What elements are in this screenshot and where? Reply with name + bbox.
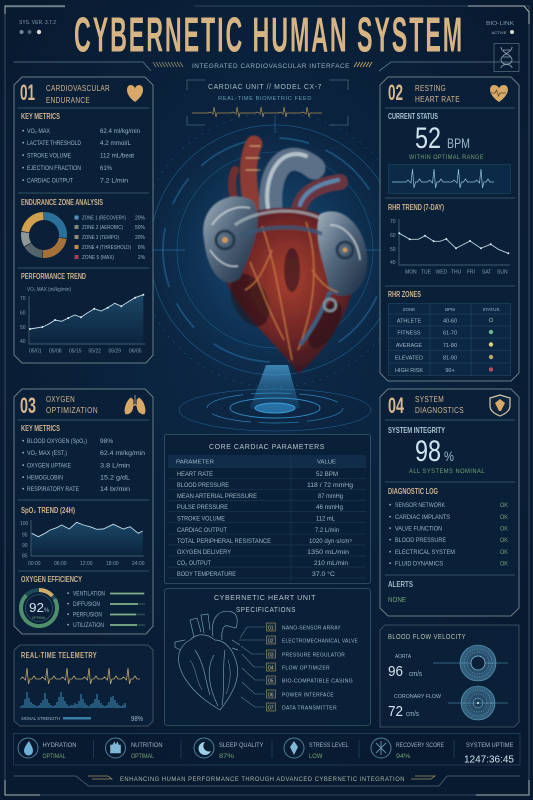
sleep quality: [194, 738, 264, 760]
spec list: 03: [268, 652, 274, 658]
table: rhr zones: 90+: [445, 368, 455, 374]
stress level: LOW: [309, 754, 323, 760]
key metrics: •: [22, 462, 25, 470]
bio-link status: ACTIVE: [492, 30, 507, 35]
central hologram rings: [138, 113, 412, 387]
alerts: [388, 580, 414, 604]
donut chart: endurance zones: ZONE 5 (MAX): [82, 255, 114, 261]
nutrition: OPTIMAL: [131, 754, 155, 760]
icon: heart: [127, 85, 143, 102]
aorta reading: 96: [388, 663, 403, 680]
key metrics: 14 br/min: [100, 486, 130, 493]
line chart: rhr trend: WED: [436, 270, 448, 276]
parameter table: BLOOD PRESSURE: [177, 483, 229, 489]
key metrics: BLOOD OXYGEN (SpO₂): [27, 438, 87, 445]
icon: dna: [494, 44, 519, 72]
diagnostic log: •: [389, 549, 392, 556]
spec list: 07: [268, 706, 274, 712]
diagnostic log: •: [389, 502, 392, 509]
signal strength: [21, 716, 143, 723]
line chart: spo2 trend: 100: [20, 521, 29, 527]
diagnostic log: BLOOD PRESSURE: [395, 537, 447, 544]
panel heading: DIAGNOSTICS: [415, 406, 464, 415]
bio-link status: BIO-LINK: [486, 21, 515, 27]
key metrics: 62.4 ml/kg/min: [100, 450, 145, 457]
donut chart: endurance zones: ZONE 1 (RECOVERY): [82, 216, 126, 222]
panel: core cardiac parameters: [164, 434, 370, 584]
diagnostic log: OK: [500, 537, 509, 544]
diagnostic log: •: [389, 514, 392, 521]
diagnostic log: •: [389, 560, 392, 568]
heading: BLOOD FLOW VELOCITY: [388, 634, 466, 641]
panel heading: [46, 395, 98, 415]
nutrition: [106, 738, 163, 760]
illustration: heart wireframe: [175, 611, 240, 710]
key metrics: •: [22, 438, 25, 445]
parameter table: [168, 455, 366, 581]
line chart: rhr trend: FRI: [467, 270, 475, 276]
panel: cybernetic heart unit specifications: [164, 588, 370, 726]
line chart: performance trend: 40: [20, 339, 26, 345]
holographic base: [179, 365, 371, 431]
cardiac unit header: REAL-TIME BIOMETRIC FEED: [218, 96, 312, 102]
icon: lungs: [125, 395, 145, 414]
status bar: [14, 733, 520, 766]
current status: CURRENT STATUS: [388, 112, 438, 121]
system integrity: %: [444, 448, 454, 464]
line chart: performance trend: [20, 272, 145, 354]
key metrics: 3.8 L/min: [100, 462, 130, 470]
diagnostic log: OK: [500, 560, 509, 568]
system uptime: [464, 742, 514, 766]
key metrics: •: [22, 140, 25, 147]
parameter table: HEART RATE: [177, 472, 213, 478]
coronary reading: [388, 694, 441, 720]
system integrity: SYSTEM INTEGRITY: [388, 426, 445, 435]
diagnostic log: OK: [500, 526, 509, 532]
panel: oxygen optimization: [14, 389, 153, 634]
efficiency bars: •: [67, 590, 70, 598]
current status: WITHIN OPTIMAL RANGE: [409, 155, 484, 161]
line chart: spo2 trend: [20, 506, 145, 567]
gauge: oxygen efficiency: OPTIMAL: [32, 616, 46, 620]
efficiency bars: PERFUSION: [73, 612, 102, 618]
line chart: rhr trend: 70: [390, 219, 396, 225]
spec list: 02: [268, 638, 274, 644]
sleep quality: 87%: [219, 754, 235, 760]
parameter table: MEAN ARTERIAL PRESSURE: [177, 494, 257, 500]
recovery score: [371, 738, 445, 760]
recovery score: RECOVERY SCORE: [396, 742, 445, 749]
spec list: PRESSURE REGULATOR: [282, 652, 345, 658]
table: rhr zones: FITNESS: [397, 330, 421, 336]
line chart: rhr trend: THU: [451, 270, 462, 276]
table: rhr zones: BPM: [445, 307, 455, 312]
panel number 01: 01: [20, 80, 35, 105]
line chart: rhr trend: MON: [405, 270, 417, 276]
line chart: performance trend: 05/29: [108, 348, 121, 354]
alerts: ALERTS: [388, 580, 414, 589]
diagnostic log: •: [389, 537, 392, 544]
line chart: performance trend: PERFORMANCE TREND: [21, 272, 86, 281]
key metrics: •: [22, 178, 25, 184]
panel number 04: 04: [388, 393, 404, 418]
heading: CORE CARDIAC PARAMETERS: [209, 442, 325, 451]
key metrics: HEMOGLOBIN: [27, 474, 63, 482]
key metrics: EJECTION FRACTION: [27, 165, 81, 172]
panel heading: [46, 84, 110, 105]
diagnostic log: ELECTRICAL SYSTEM: [395, 549, 455, 556]
key metrics: [21, 112, 140, 184]
left silver atrium: [203, 196, 258, 283]
line chart: performance trend: 05/08: [49, 348, 62, 354]
line chart: rhr trend: SUN: [497, 270, 508, 276]
panel: blood flow velocity: [380, 625, 519, 727]
line chart: spo2 trend: SpO₂ TREND (24H): [21, 506, 75, 515]
efficiency bars: [67, 590, 145, 629]
line chart: rhr trend: TUE: [421, 270, 432, 276]
line chart: spo2 trend: 85: [22, 554, 28, 560]
footer tagline: ENHANCING HUMAN PERFORMANCE THROUGH ADVANCED CYBERNETIC INTEGRATION: [120, 776, 405, 783]
line chart: performance trend: 60: [20, 310, 26, 316]
parameter table: 1020 dyn·s/cm⁵: [309, 538, 353, 545]
donut chart: endurance zones: 20%: [135, 216, 146, 222]
panel heading: [415, 84, 460, 104]
coronary reading: 72: [388, 703, 403, 720]
efficiency bars: UTILIZATION: [73, 622, 104, 629]
recovery score: 94%: [396, 754, 411, 760]
donut chart: endurance zones: ZONE 2 (AEROBIC): [82, 225, 123, 231]
line chart: rhr trend: RHR TREND (7-DAY): [388, 203, 444, 212]
key metrics: •: [22, 128, 25, 135]
donut chart: endurance zones: ZONE 3 (TEMPO): [82, 235, 119, 241]
efficiency bars: •: [67, 612, 70, 618]
panel: resting heart rate: [380, 77, 519, 381]
key metrics: KEY METRICS: [21, 424, 60, 433]
right silver atrium: [317, 211, 367, 296]
line chart: spo2 trend: 18:00: [106, 561, 119, 567]
line chart: spo2 trend: 95: [22, 532, 28, 538]
parameter table: 210 mL/min: [314, 561, 348, 567]
subtitle: [153, 62, 372, 70]
diagnostic log: FLUID DYNAMICS: [395, 560, 444, 568]
donut chart: endurance zones: ENDURANCE ZONE ANALYSIS: [21, 198, 103, 207]
line chart: spo2 trend: 90: [22, 543, 28, 549]
efficiency bars: •: [67, 601, 70, 608]
line chart: spo2 trend: 24:00: [132, 561, 145, 567]
chart: aorta flow: [433, 645, 508, 681]
diagnostic log: OK: [500, 502, 509, 509]
efficiency bars: VENTILATION: [73, 590, 105, 598]
key metrics: KEY METRICS: [21, 112, 60, 121]
mechanical and coronary details: [210, 207, 360, 360]
spec list: 01: [268, 626, 274, 632]
table: rhr zones: 40-60: [443, 318, 457, 324]
efficiency bars: DIFFUSION: [73, 601, 100, 608]
table: rhr zones: STATUS: [482, 307, 500, 312]
key metrics: STROKE VOLUME: [27, 152, 72, 160]
key metrics: •: [22, 474, 25, 482]
donut chart: endurance zones: 2%: [138, 255, 146, 261]
key metrics: OXYGEN UPTAKE: [27, 462, 72, 470]
diagnostic log: CARDIAC IMPLANTS: [395, 514, 451, 521]
key metrics: 62.4 ml/kg/min: [100, 128, 140, 135]
key metrics: 98%: [100, 438, 113, 445]
parameter table: STROKE VOLUME: [177, 516, 225, 522]
parameter table: BODY TEMPERATURE: [177, 572, 236, 578]
key metrics: VO₂ MAX (EST.): [27, 450, 67, 457]
panel number 02: 02: [388, 80, 403, 105]
hydration: [18, 738, 77, 760]
cardiac unit header: CARDIAC UNIT // MODEL CX-7: [208, 84, 322, 91]
signal bars: [21, 692, 125, 708]
parameter table: 1350 mL/min: [307, 550, 349, 556]
gauge: oxygen efficiency: 92: [29, 600, 44, 615]
parameter table: PULSE PRESSURE: [177, 505, 228, 511]
system version header: SYS. VER. 3.7.2: [19, 20, 56, 26]
subtitle: INTEGRATED CARDIOVASCULAR INTERFACE: [192, 63, 350, 70]
table: rhr zones: [388, 290, 510, 376]
cardiac unit header: [187, 80, 348, 125]
nutrition: NUTRITION: [131, 742, 163, 749]
heading: [214, 595, 316, 614]
line chart: performance trend: 05/22: [88, 348, 101, 354]
stress level: STRESS LEVEL: [309, 742, 349, 749]
diagnostic log: SENSOR NETWORK: [395, 502, 446, 509]
parameter table: OXYGEN DELIVERY: [177, 550, 231, 556]
heading: CYBERNETIC HEART UNIT: [214, 595, 316, 602]
table: rhr zones: ATHLETE: [397, 318, 421, 324]
line chart: spo2 trend: 00:00: [28, 561, 41, 567]
diagnostic log: •: [389, 526, 392, 532]
icon: heart with pulse: [490, 85, 508, 102]
line chart: performance trend: VO₂ MAX (ml/kg/min): [27, 287, 71, 293]
efficiency bars: •: [67, 622, 70, 629]
stress level: [284, 738, 349, 760]
line chart: rhr trend: 60: [390, 233, 396, 239]
parameter table: 112 mL: [316, 516, 336, 522]
spec list: 05: [268, 678, 274, 684]
parameter table: PARAMETER: [176, 460, 214, 466]
heading: SPECIFICATIONS: [236, 607, 296, 614]
system integrity: ALL SYSTEMS NOMINAL: [409, 469, 485, 475]
spec list: ELECTROMECHANICAL VALVE: [282, 638, 358, 644]
panel heading: SYSTEM: [415, 395, 444, 404]
donut chart: endurance zones: [18, 198, 146, 261]
panel heading: CARDIOVASCULAR: [46, 84, 110, 93]
table: rhr zones: RHR ZONES: [388, 290, 421, 299]
spec list: NANO-SENSOR ARRAY: [282, 626, 341, 632]
spec list: POWER INTERFACE: [282, 692, 334, 698]
gauge: oxygen efficiency: [14, 575, 82, 633]
key metrics: [21, 424, 145, 493]
panel heading: OPTIMIZATION: [46, 406, 98, 415]
parameter table: 52 BPM: [316, 472, 338, 478]
icon: shield: [490, 395, 510, 416]
heading: REAL-TIME TELEMETRY: [21, 651, 97, 660]
gauge: oxygen efficiency: OXYGEN EFFICIENCY: [21, 575, 82, 584]
key metrics: RESPIRATORY RATE: [27, 486, 80, 493]
table: rhr zones: 61-70: [443, 330, 457, 336]
system integrity: [388, 426, 485, 475]
panel: cardiovascular endurance: [14, 77, 153, 363]
panel number 03: 03: [20, 393, 36, 418]
key metrics: 7.2 L/min: [100, 178, 128, 184]
table: rhr zones: HIGH RISK: [395, 368, 423, 374]
coronary reading: CORONARY FLOW: [394, 694, 441, 700]
key metrics: LACTATE THRESHOLD: [27, 140, 81, 147]
spec list: DATA TRANSMITTER: [282, 706, 337, 712]
alerts: NONE: [388, 597, 406, 604]
illustration: cybernetic heart: [203, 144, 367, 374]
panel heading: OXYGEN: [46, 395, 75, 404]
line chart: performance trend: 70: [20, 296, 26, 302]
panel heading: HEART RATE: [415, 95, 460, 104]
current status: BPM: [447, 135, 470, 151]
panel: real-time telemetry: [14, 645, 153, 726]
parameter table: 37.0 °C: [312, 572, 336, 578]
system version header: [19, 20, 56, 34]
panel heading: RESTING: [415, 84, 446, 93]
panel heading: ENDURANCE: [46, 96, 90, 105]
coronary reading: cm/s: [406, 711, 419, 718]
aorta reading: [388, 654, 422, 680]
line chart: performance trend: 06/05: [129, 348, 142, 354]
panel: system diagnostics: [380, 389, 519, 616]
chart: coronary flow: [448, 686, 508, 720]
ventricle body: [223, 208, 356, 374]
ecg waveform: [20, 668, 140, 684]
parameter table: 118 / 72 mmHg: [307, 483, 353, 489]
key metrics: •: [22, 450, 25, 457]
line chart: rhr trend: 50: [390, 247, 396, 253]
table: rhr zones: AVERAGE: [396, 343, 422, 349]
body shading: [223, 248, 348, 354]
gauge: oxygen efficiency: %: [44, 608, 50, 614]
key metrics: VO₂ MAX: [27, 128, 51, 135]
key metrics: 4.2 mmol/L: [100, 140, 131, 147]
line chart: rhr trend: SAT: [482, 270, 491, 276]
spec list: 04: [268, 666, 274, 672]
spec list: FLOW OPTIMIZER: [282, 666, 330, 672]
spec list: 06: [268, 692, 274, 698]
line chart: spo2 trend: 12:00: [80, 561, 93, 567]
donut chart: endurance zones: ZONE 4 (THRESHOLD): [82, 245, 131, 251]
heart vessels: [232, 144, 340, 222]
spec list: [239, 623, 358, 712]
key metrics: •: [22, 152, 25, 160]
key metrics: 61%: [100, 165, 112, 172]
parameter table: CARDIAC OUTPUT: [177, 528, 227, 534]
donut chart: endurance zones: 8%: [138, 245, 146, 251]
key metrics: 112 mL/beat: [100, 152, 134, 160]
system uptime: SYSTEM UPTIME: [466, 742, 514, 749]
key metrics: CARDIAC OUTPUT: [27, 178, 73, 184]
diagnostic log: DIAGNOSTIC LOG: [388, 487, 438, 496]
diagnostic log: OK: [500, 514, 509, 521]
line chart: performance trend: 05/15: [69, 348, 82, 354]
hydration: HYDRATION: [42, 742, 77, 749]
system integrity: 98: [415, 435, 441, 468]
signal strength: 98%: [131, 716, 143, 723]
line chart: spo2 trend: 06:00: [54, 561, 67, 567]
key metrics: •: [22, 486, 25, 493]
table: rhr zones: 81-90: [443, 356, 457, 362]
aorta reading: cm/s: [409, 671, 422, 678]
sleep quality: SLEEP QUALITY: [219, 742, 264, 749]
panel heading: [415, 395, 464, 415]
table: rhr zones: ZONE: [403, 307, 415, 312]
table: rhr zones: 71-80: [443, 343, 457, 349]
donut chart: endurance zones: 20%: [135, 235, 146, 241]
key metrics: 15.2 g/dL: [100, 474, 130, 482]
current status: 52: [415, 122, 441, 155]
current status: [388, 112, 510, 194]
bio-link status: [486, 21, 515, 35]
parameter table: CO₂ OUTPUT: [177, 561, 211, 567]
line chart: rhr trend: 40: [390, 260, 396, 266]
parameter table: VALUE: [317, 460, 337, 466]
hydration: OPTIMAL: [42, 754, 66, 760]
parameter table: TOTAL PERIPHERAL RESISTANCE: [177, 539, 271, 545]
key metrics: •: [22, 165, 25, 172]
diagnostic log: VALVE FUNCTION: [395, 526, 442, 532]
parameter table: 7.2 L/min: [315, 528, 339, 534]
parameter table: 87 mmHg: [318, 494, 343, 500]
line chart: rhr trend: [388, 203, 510, 276]
spec list: BIO-COMPATIBLE CASING: [282, 678, 353, 684]
system uptime: 1247:36:45: [464, 754, 514, 766]
line chart: performance trend: 05/01: [29, 348, 42, 354]
aorta reading: AORTA: [395, 654, 412, 660]
line chart: performance trend: 50: [20, 325, 26, 331]
footer tagline: [14, 776, 520, 786]
donut chart: endurance zones: 50%: [135, 225, 146, 231]
signal strength: SIGNAL STRENGTH: [21, 716, 60, 721]
diagnostic log: OK: [500, 549, 509, 556]
table: rhr zones: ELEVATED: [395, 356, 423, 362]
diagnostic log: [388, 487, 509, 568]
parameter table: 46 mmHg: [316, 505, 343, 511]
